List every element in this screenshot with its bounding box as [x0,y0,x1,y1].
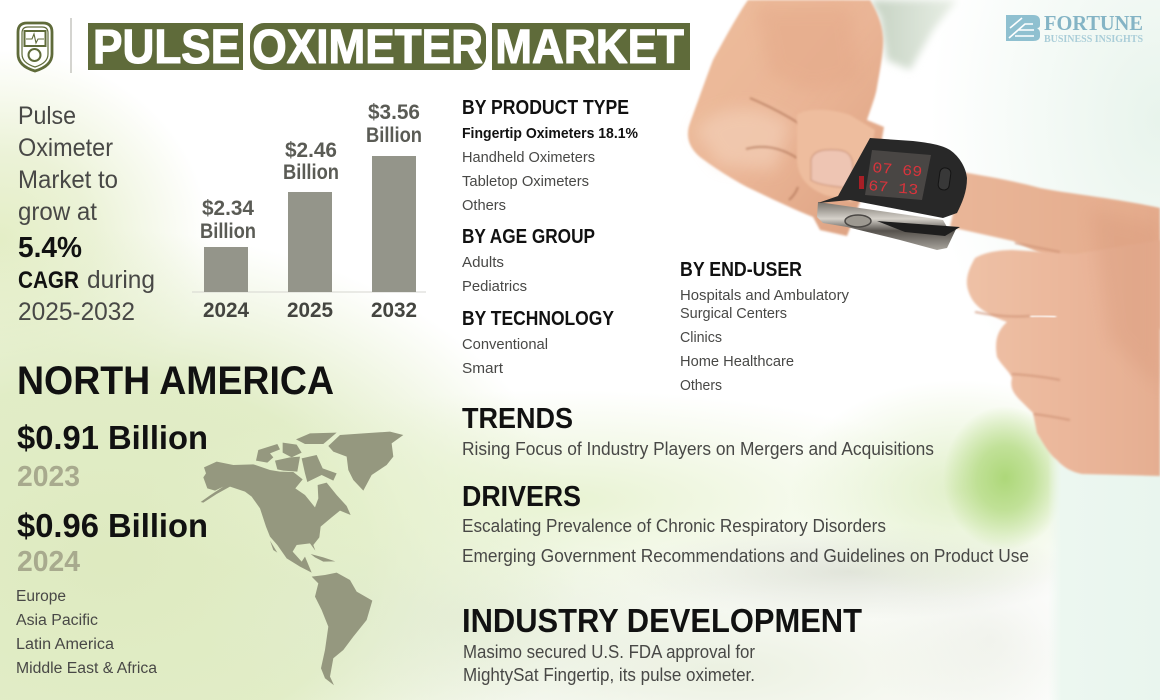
segment: by product type: Fingertip Oximeters 18.1% [462,125,638,142]
segment: by end-user: Others [680,377,722,394]
bar 2032: $3.56 [368,100,420,124]
oximeter: 67 13 [868,178,919,199]
segment: by end-user: Clinics [680,329,722,346]
CAGR statement: Market to [18,166,118,194]
segment: by age group [462,226,595,295]
segment: by product type: BY PRODUCT TYPE [462,97,629,119]
lower fingers [967,240,1160,476]
drivers [462,481,1029,566]
drivers: Emerging Government Recommendations and Guidelines on Product Use [462,545,1029,566]
oximeter [817,138,967,250]
segment: by technology: Conventional [462,336,548,353]
trends [462,403,934,459]
map: the Americas [201,432,403,685]
regional panel: North America: $0.91 Billion [17,419,208,456]
bar chart: market size [192,100,426,322]
title icon: oximeter badge [18,23,52,71]
CAGR statement: Pulse [18,102,76,130]
bar 2025: 2025 [287,298,333,322]
CAGR statement: CAGR [18,267,79,294]
index finger [950,172,1160,330]
regional panel: North America [16,359,334,677]
bar 2032 [366,100,422,322]
industry development: Masimo secured U.S. FDA approval for [463,642,755,662]
segment: by age group: BY AGE GROUP [462,226,595,248]
segment: by product type: Tabletop Oximeters [462,173,589,190]
segment: by end-user: BY END-USER [680,259,802,281]
regional panel: North America: 2024 [17,546,80,578]
other regions list: Latin America [16,636,114,653]
thumbnail [811,150,853,189]
sleeve [870,0,957,70]
logo: Fortune Business Insights: BUSINESS INSIGHTS [1044,34,1143,45]
other regions list [16,588,157,677]
title: PULSE OXIMETER MARKET [93,21,684,74]
bar 2024 [200,196,256,322]
segment: by product type: Others [462,197,506,214]
photo: hand holding pulse oximeter [688,0,1160,476]
logo: Fortune Business Insights [1006,11,1143,45]
CAGR statement: 2025-2032 [18,298,135,326]
bar 2025: $2.46 [285,138,337,162]
bar 2025: Billion [283,160,339,184]
bar 2032: 2032 [371,298,417,322]
industry development [462,602,862,685]
regional panel: North America: 2023 [17,461,80,493]
bar 2032: Billion [366,123,422,147]
trends: TRENDS [462,403,573,435]
drivers: DRIVERS [462,481,581,513]
bar 2024: $2.34 [202,196,254,220]
regional panel: North America: $0.96 Billion [17,507,208,544]
segment: by end-user: Surgical Centers [680,305,787,322]
oximeter screen [865,150,931,200]
segment: by end-user: Hospitals and Ambulatory [680,287,849,304]
segment: by end-user: Home Healthcare [680,353,794,370]
CAGR statement: Oximeter [18,134,113,162]
upper hand [688,0,884,236]
trends: Rising Focus of Industry Players on Mergers and Acquisitions [462,438,934,459]
CAGR statement: 5.4% [18,232,82,264]
CAGR statement: grow at [18,198,97,226]
oximeter reading: 07 69 [872,160,923,181]
segment: by product type: Handheld Oximeters [462,149,595,166]
segment: by age group: Pediatrics [462,278,527,295]
industry development: INDUSTRY DEVELOPMENT [462,602,862,639]
bar 2024: Billion [200,219,256,243]
segment: by technology: Smart [462,360,504,377]
CAGR statement [18,102,155,326]
shirt edge [1048,430,1160,700]
segment: by age group: Adults [462,254,504,271]
segment: by end-user [680,259,849,394]
CAGR statement: during [87,266,155,294]
segment: by technology [462,308,615,377]
other regions list: Middle East & Africa [16,660,157,677]
bar 2025 [283,138,339,322]
logo: Fortune Business Insights: FORTUNE [1044,11,1143,35]
bar 2024: 2024 [203,298,249,322]
thumb [797,110,875,202]
segment: by product type [462,97,638,214]
other regions list: Asia Pacific [16,612,98,629]
industry development: MightySat Fingertip, its pulse oximeter. [463,665,755,685]
drivers: Escalating Prevalence of Chronic Respiratory Disorders [462,515,886,536]
other regions list: Europe [16,588,66,605]
segment: by technology: BY TECHNOLOGY [462,308,615,330]
regional panel: North America: NORTH AMERICA [17,359,334,403]
